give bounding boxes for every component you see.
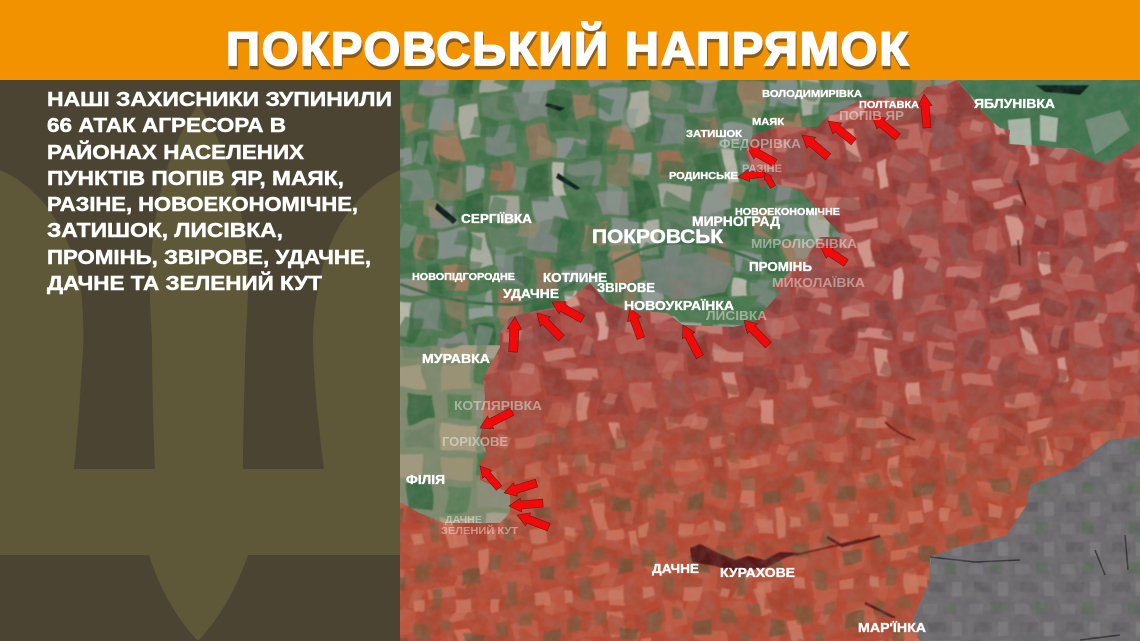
label: ДАЧНЕ bbox=[445, 514, 482, 526]
label: КОТЛЯРІВКА bbox=[454, 398, 543, 413]
title: ПОКРОВСЬКИЙ НАПРЯМОК bbox=[226, 22, 908, 75]
arrow: Лисівка bbox=[744, 320, 772, 348]
arrow: Удачне east bbox=[552, 301, 585, 323]
green belt near the line bbox=[660, 295, 760, 325]
label: ЗВІРОВЕ bbox=[597, 281, 655, 295]
arrow: Полтавка bbox=[918, 94, 932, 128]
label: ЗАТИШОК bbox=[686, 128, 743, 140]
map bbox=[390, 70, 1140, 641]
arrow: Родинське bbox=[738, 169, 765, 182]
trident emblem bbox=[0, 105, 400, 641]
arrow: Федорівка bbox=[746, 146, 777, 167]
line 4: ПУНКТІВ ПОПІВ ЯР, МАЯК, bbox=[47, 168, 344, 190]
label: ПРОМІНЬ bbox=[749, 259, 812, 274]
label: ФЕДОРІВКА bbox=[719, 136, 802, 151]
label: КОТЛИНЕ bbox=[543, 271, 607, 285]
northeast light fields bbox=[1008, 115, 1058, 150]
text block: summary bbox=[47, 89, 392, 295]
arrow: Разіне bbox=[764, 172, 776, 189]
label: МАР'ЇНКА bbox=[858, 620, 926, 635]
line 3: РАЙОНАХ НАСЕЛЕНИХ bbox=[47, 140, 305, 164]
label: РОДИНСЬКЕ bbox=[669, 170, 738, 182]
map base: unoccupied farmland bbox=[390, 70, 1140, 641]
arrow: Миролюбівка bbox=[820, 246, 848, 266]
label: МИКОЛАЇВКА bbox=[772, 275, 866, 290]
Donetsk gray urban area bbox=[913, 437, 1140, 641]
arrow: Маяк bbox=[802, 134, 831, 160]
line 8: ДАЧНЕ ТА ЗЕЛЕНИЙ КУТ bbox=[47, 271, 322, 295]
label: НОВОПІДГОРОДНЕ bbox=[412, 271, 515, 283]
label: ЗЕЛЕНИЙ КУТ bbox=[441, 524, 519, 537]
road lines bbox=[400, 243, 760, 304]
Kurakhove reservoir bbox=[690, 544, 800, 572]
arrow: Зелений Кут bbox=[516, 512, 550, 532]
arrow: Попів Яр bbox=[872, 116, 900, 140]
line 1: НАШІ ЗАХИСНИКИ ЗУПИНИЛИ bbox=[47, 89, 392, 111]
map texture bbox=[400, 80, 1140, 641]
occupied zone bbox=[390, 70, 1140, 641]
eastern dark ravines bbox=[795, 180, 1026, 555]
label: ПОКРОВСЬК bbox=[592, 227, 723, 248]
northeast green sector bbox=[957, 80, 1140, 163]
label: ПОПІВ ЯР bbox=[839, 108, 904, 123]
label: МИРНОГРАД bbox=[692, 214, 780, 229]
label: ЯБЛУНІВКА bbox=[974, 97, 1055, 111]
line 5: РАЗІНЕ, НОВОЕКОНОМІЧНЕ, bbox=[47, 194, 358, 216]
water bodies bbox=[435, 85, 1090, 224]
label: РАЗІНЕ bbox=[742, 163, 782, 175]
label: СЕРГІЇВКА bbox=[461, 211, 532, 226]
label: КУРАХОВЕ bbox=[720, 566, 795, 580]
label: НОВОУКРАЇНКА bbox=[624, 298, 734, 313]
arrow: Горіхове bbox=[480, 466, 502, 490]
gray area ravines bbox=[930, 535, 1128, 640]
label: МУРАВКА bbox=[422, 352, 490, 366]
label: ЛИСІВКА bbox=[706, 308, 768, 323]
southern olive field patches bbox=[400, 404, 1139, 641]
label: МИРОЛЮБІВКА bbox=[751, 236, 858, 251]
arrow: Дачне north bbox=[504, 479, 538, 497]
arrow: Новоукраїнка bbox=[682, 324, 704, 359]
label: НОВОЕКОНОМІЧНЕ bbox=[735, 206, 840, 218]
place labels bbox=[406, 88, 1055, 635]
left panel background bbox=[0, 80, 400, 641]
label: ФІЛІЯ bbox=[406, 473, 445, 487]
line 6: ЗАТИШОК, ЛИСІВКА, bbox=[47, 220, 283, 242]
arrow: Котлярівка bbox=[480, 408, 514, 430]
label: ГОРІХОВЕ bbox=[442, 434, 508, 449]
label: ВОЛОДИМИРІВКА bbox=[762, 88, 862, 100]
header band bbox=[0, 0, 1140, 80]
Pokrovsk urban area bbox=[640, 252, 735, 300]
label: ДАЧНЕ bbox=[652, 562, 699, 576]
line 2: 66 АТАК АГРЕСОРА В bbox=[47, 115, 286, 137]
arrow: Дачне centre bbox=[508, 498, 544, 512]
arrow: Удачне centre bbox=[536, 312, 564, 342]
label: МАЯК bbox=[752, 116, 785, 128]
line 7: ПРОМІНЬ, ЗВІРОВЕ, УДАЧНЕ, bbox=[47, 247, 371, 269]
arrow: Удачне south bbox=[506, 317, 522, 352]
frontline attack arrows bbox=[475, 93, 934, 534]
southwest tan farmland bbox=[400, 345, 510, 523]
arrow: Звірове bbox=[627, 308, 645, 340]
label: УДАЧНЕ bbox=[503, 287, 559, 301]
Kurakhove east ravine bbox=[827, 536, 880, 546]
arrow: Попів Яр west bbox=[828, 120, 856, 146]
label: ПОЛТАВКА bbox=[859, 99, 919, 111]
